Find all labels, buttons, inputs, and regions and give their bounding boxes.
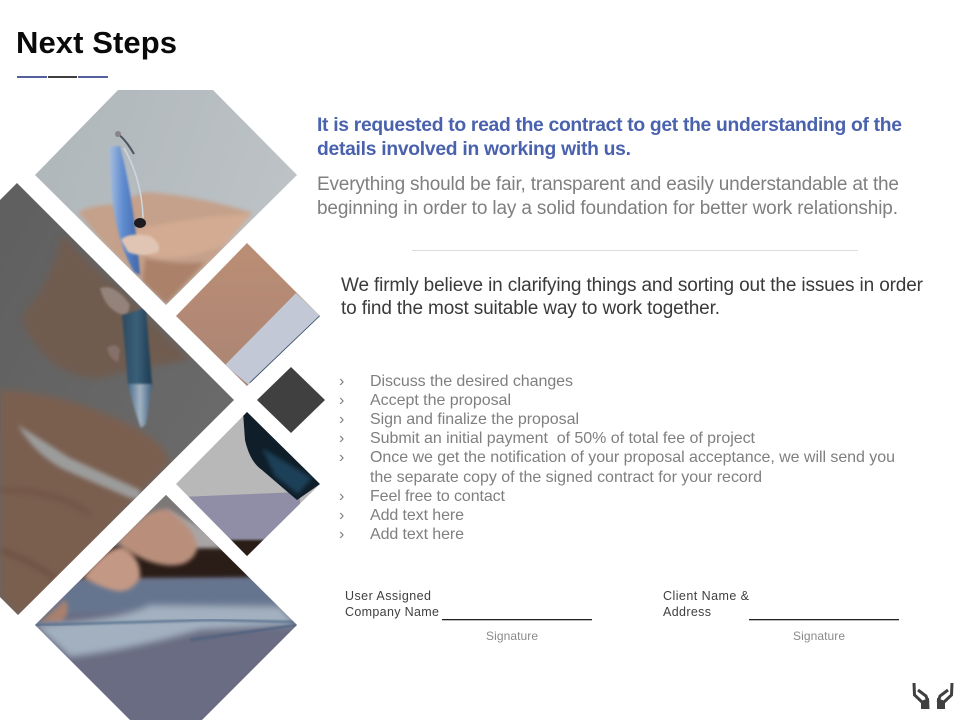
- steps list: Add text here: [370, 507, 464, 524]
- icon: open hands: [914, 683, 952, 709]
- photo collage: diamonds: [0, 85, 325, 720]
- signature block: client: Address: [663, 605, 711, 619]
- steps list: Accept the proposal: [370, 392, 511, 409]
- photo diamond: wrist and cuff: [176, 243, 320, 386]
- steps list: ›: [339, 392, 344, 409]
- signature block: user: Company Name: [345, 605, 439, 619]
- steps list: ›: [339, 488, 344, 505]
- photo diamond: hand holding pen top: [30, 85, 300, 310]
- steps list: Feel free to contact: [370, 488, 506, 505]
- dark paragraph: to find the most suitable way to work together.: [341, 298, 720, 319]
- dark paragraph: We firmly believe in clarifying things and sorting out the issues in order: [341, 275, 924, 296]
- signature block: client: Client Name &: [663, 589, 750, 603]
- steps list: Once we get the notification of your proposal acceptance, we will send you: [370, 449, 895, 466]
- steps list: the separate copy of the signed contract for your record: [370, 469, 762, 486]
- signature block: client: [663, 589, 899, 643]
- steps list: Sign and finalize the proposal: [370, 411, 579, 428]
- steps list: Submit an initial payment of 50% of total fee of project: [370, 430, 756, 447]
- blue lead paragraph: [317, 115, 902, 160]
- steps list: ›: [339, 430, 344, 447]
- signature block: client: Signature: [793, 629, 845, 643]
- photo diamond: fingers on papers: [30, 488, 300, 720]
- grey paragraph: beginning in order to lay a solid foundation for better work relationship.: [317, 198, 898, 219]
- blue lead paragraph: It is requested to read the contract to get the understanding of the: [317, 115, 902, 136]
- steps list: Discuss the desired changes: [370, 373, 573, 390]
- steps list: ›: [339, 526, 344, 543]
- signature block: user: Signature: [486, 629, 538, 643]
- steps list: [339, 373, 895, 543]
- signature block: user: [345, 589, 592, 643]
- photo diamond: sleeve and paper: [176, 412, 320, 556]
- steps list: ›: [339, 373, 344, 390]
- grey paragraph: [317, 174, 899, 219]
- steps list: ›: [339, 449, 344, 466]
- dark diamond: [257, 367, 325, 433]
- dark paragraph: [341, 275, 924, 319]
- title: Next Steps: [16, 25, 177, 60]
- blue lead paragraph: details involved in working with us.: [317, 139, 631, 160]
- photo diamond: dimmed hands left: [0, 180, 240, 620]
- steps list: ›: [339, 411, 344, 428]
- steps list: Add text here: [370, 526, 464, 543]
- title underline accent: [17, 76, 108, 78]
- grey paragraph: Everything should be fair, transparent and easily understandable at the: [317, 174, 899, 195]
- signature block: user: User Assigned: [345, 589, 431, 603]
- steps list: ›: [339, 507, 344, 524]
